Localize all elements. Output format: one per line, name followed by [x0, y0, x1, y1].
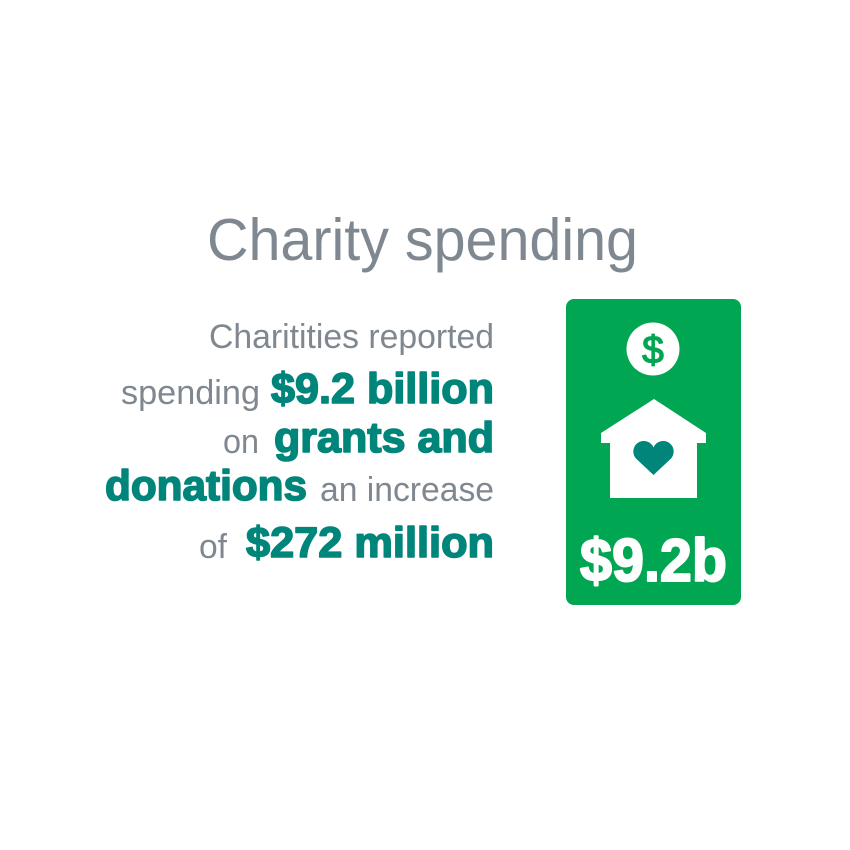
panel: green stat card	[566, 299, 741, 605]
text block: spending summary: spending	[121, 374, 260, 412]
text block: spending summary: donations	[105, 462, 307, 510]
icon: dollar coin: $	[642, 329, 664, 372]
text block: spending summary	[105, 318, 494, 567]
text block: spending summary: on	[223, 423, 259, 461]
text block: spending summary: $9.2 billion	[271, 365, 494, 413]
stat value: $9.2b	[580, 527, 727, 594]
text block: spending summary: an increase	[320, 471, 494, 509]
text block: spending summary: grants and	[274, 414, 494, 462]
icon: house with heart	[601, 399, 706, 498]
icon: dollar coin	[626, 322, 680, 376]
text block: spending summary: Charitities reported	[209, 318, 494, 356]
text block: spending summary: of	[199, 528, 228, 566]
text block: spending summary: $272 million	[246, 519, 494, 567]
title: Charity spending	[207, 207, 638, 273]
